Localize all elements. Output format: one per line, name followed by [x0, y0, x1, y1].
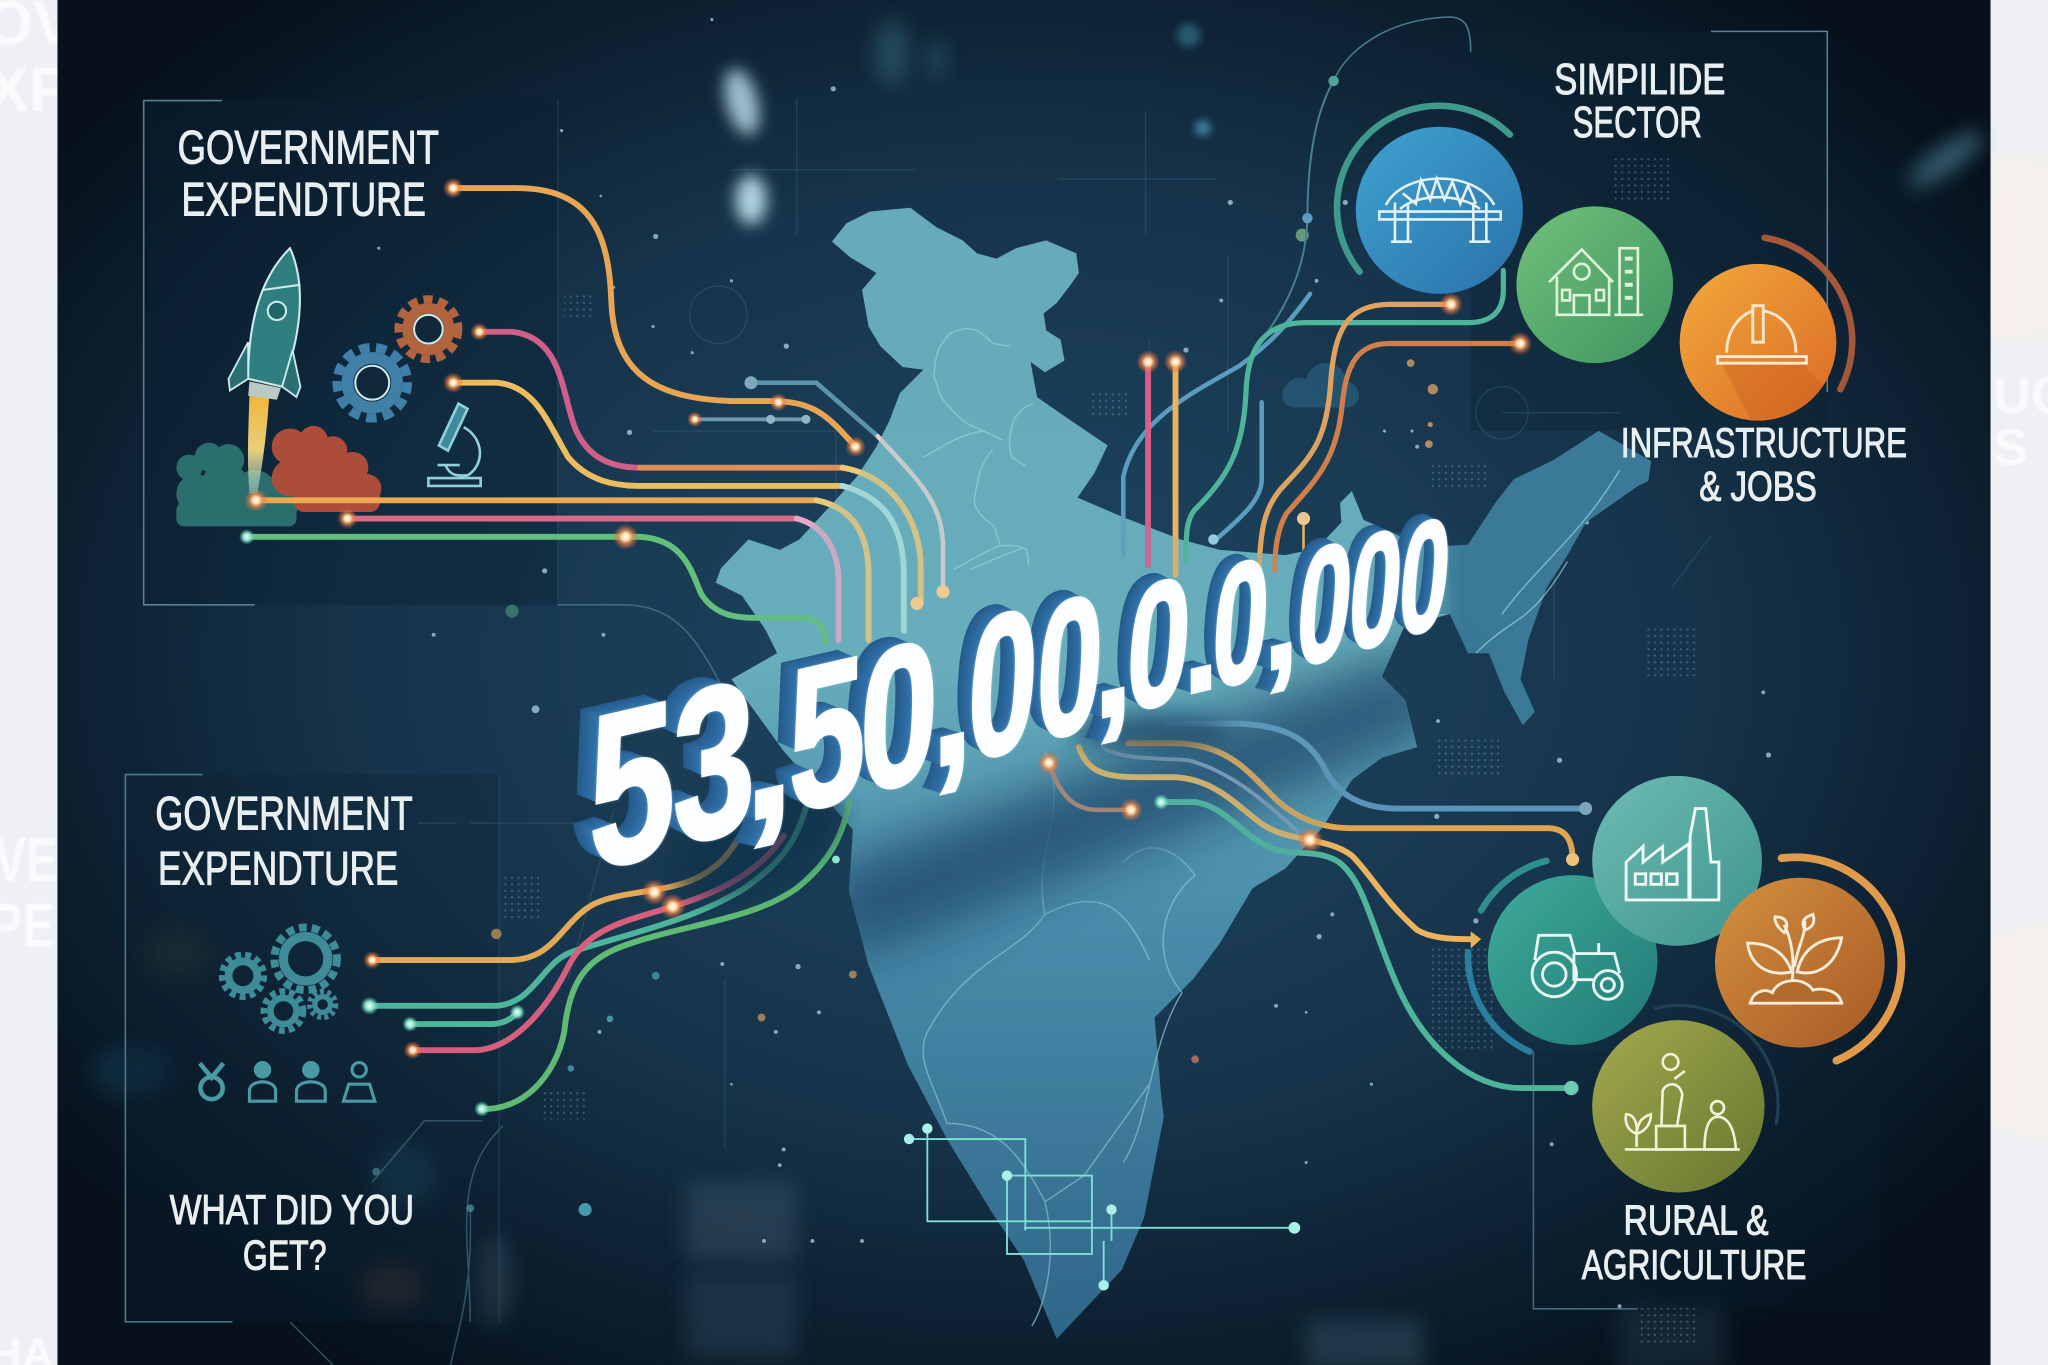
big 3D number: , [931, 594, 973, 808]
map tint softening the lines over land [716, 208, 1450, 1339]
heading: government expenditure: EXPENDTURE [158, 841, 398, 894]
map of India [716, 208, 1651, 1339]
big 3D number: 0 [1031, 552, 1108, 784]
background strip: right blurred edge: S [1993, 419, 2028, 477]
panel: top-right box [1471, 31, 1827, 431]
shadow dimming line ends beneath the number [656, 713, 1228, 921]
big 3D number: 0 [1342, 493, 1410, 688]
icon: people row [200, 1063, 375, 1101]
label: rural and agriculture: AGRICULTURE [1582, 1241, 1806, 1288]
label: infrastructure and jobs [1621, 419, 1907, 509]
big 3D number: 0 [1392, 483, 1457, 672]
big 3D number: 5 [589, 654, 675, 919]
state borders on the map [923, 329, 1620, 1326]
big 3D number: 0 [1121, 537, 1197, 752]
big 3D number: , [1263, 528, 1299, 705]
background strip: left blurred edge [0, 0, 75, 1365]
big 3D number: 0 [963, 564, 1043, 806]
big 3D number: , [1093, 561, 1133, 756]
label: infrastructure and jobs: INFRASTRUCTURE [1621, 419, 1907, 466]
icon: orange gear [398, 299, 458, 359]
heading: simpilide sector [1554, 56, 1725, 147]
big 3D number: 3 [673, 633, 755, 893]
label: rural and agriculture: RURAL & [1624, 1196, 1769, 1243]
heading: government expenditure [155, 786, 413, 894]
big 3D number: 0 [1290, 505, 1360, 704]
icon: microscope [428, 404, 481, 486]
icon: bridge circle [1337, 106, 1523, 294]
panel: simplified sector top-right [1337, 56, 1907, 509]
icon: rocket launch [176, 248, 381, 526]
label: rural and agriculture [1582, 1196, 1806, 1288]
shadow band under the number [862, 699, 1404, 908]
lines: top-right flows [1123, 81, 1520, 575]
panel: government expenditure lower-left [155, 786, 414, 1279]
icon: tractor circle [1488, 875, 1657, 1045]
big 3D number: 0 [856, 596, 942, 838]
lines: lower-right flows [1049, 724, 1586, 1088]
lines: top-left panel flows [247, 188, 943, 643]
big 3D number: 0 [1206, 520, 1275, 727]
text: what did you get: WHAT DID YOU [170, 1186, 414, 1233]
icon: plant circle [1715, 878, 1885, 1048]
icon: farmers circle [1592, 1020, 1765, 1193]
heading: government expenditure [178, 120, 439, 226]
lines: lower-left flows [370, 784, 849, 1109]
heading: simpilide sector: SECTOR [1573, 99, 1702, 147]
panel: rural and agriculture lower-right [1468, 776, 1901, 1288]
dot grid textures [503, 154, 1698, 1345]
decorative arcs around the circles [1468, 857, 1901, 1123]
HUD decorations: crosshairs and rings [418, 98, 1711, 1149]
heading: government expenditure: GOVERNMENT [155, 786, 413, 839]
icon: factory circle [1592, 776, 1762, 946]
label: infrastructure and jobs: & JOBS [1699, 462, 1817, 509]
icon: blue gear [337, 347, 408, 418]
big 3D number: 5 [789, 612, 865, 858]
icon: helmet circle [1680, 238, 1852, 421]
big 3D number: . [1183, 545, 1219, 730]
big 3D number: , [744, 646, 794, 862]
panel: top-left box [144, 99, 558, 605]
circuit lines over the south of the map [904, 1123, 1300, 1291]
panel: government expenditure top-left [176, 120, 481, 526]
icon: buildings circle [1516, 206, 1673, 363]
heading: simpilide sector: SIMPILIDE [1554, 56, 1725, 104]
text: what did you get: GET? [243, 1232, 327, 1279]
glowing line nodes [239, 76, 1592, 1117]
text: what did you get [170, 1186, 414, 1279]
panel: lower-right box [1533, 1052, 1881, 1309]
heading: government expenditure: EXPENDTURE [182, 173, 426, 226]
panel: lower-left box [125, 775, 499, 1322]
background strip: right blurred edge [1917, 0, 2048, 1365]
star particles [372, 18, 1771, 1308]
heading: government expenditure: GOVERNMENT [178, 120, 439, 173]
faint cloud behind lines [1282, 363, 1359, 408]
icon: gears cluster [222, 927, 337, 1031]
